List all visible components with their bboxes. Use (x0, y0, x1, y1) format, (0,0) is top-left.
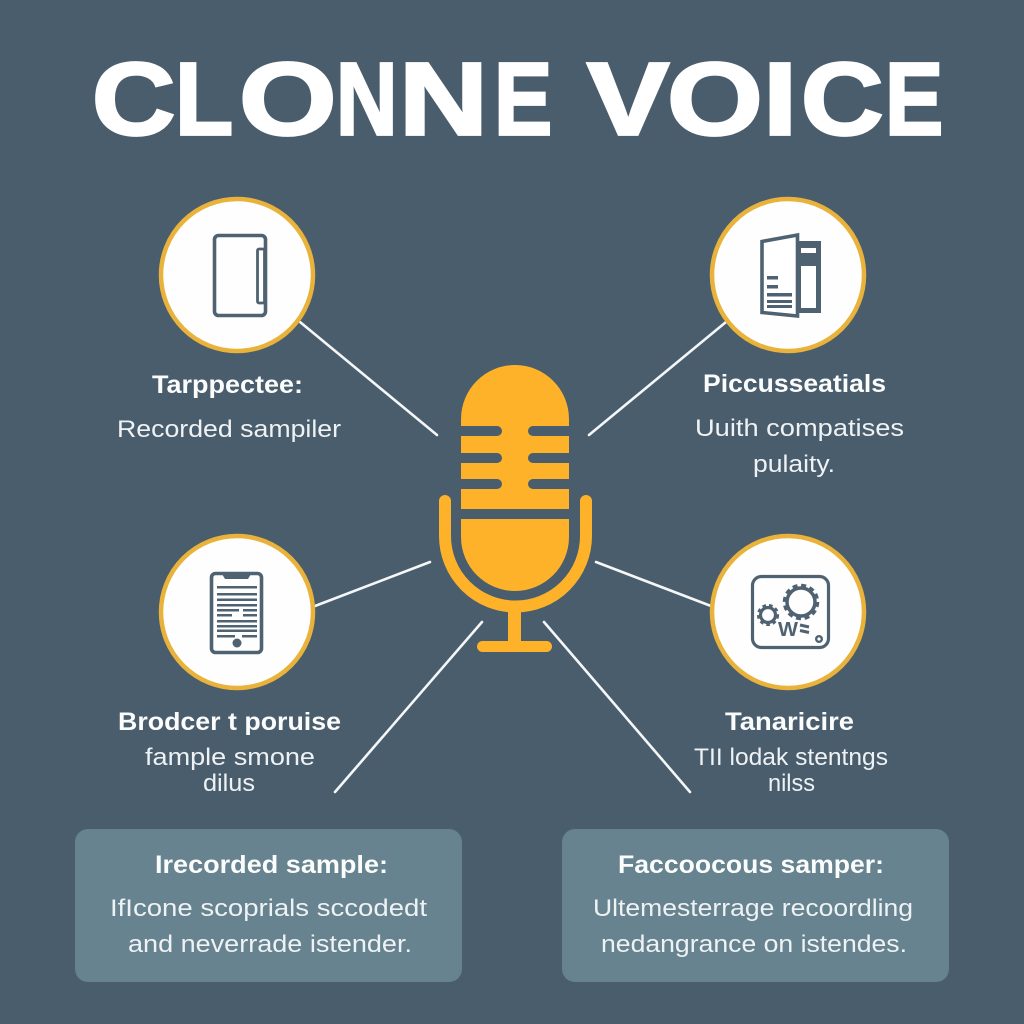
panel: recorded sample: IfIcone scoprials sccodedt (110, 895, 427, 922)
title: E (885, 41, 943, 156)
panel: recorded sample: Irecorded sample: (155, 851, 388, 879)
title: O (667, 41, 762, 156)
title: I (763, 41, 797, 156)
title: O (238, 41, 336, 156)
panel: recorded sample: and neverrade istender. (128, 931, 412, 958)
topic label: bottom right: Tanaricire (725, 708, 854, 736)
panel: faccoocous samper: Ultemesterrage recoordling (593, 895, 913, 922)
topic label: top right: Piccusseatials (703, 370, 886, 398)
topic label: top right (695, 370, 904, 478)
icon circle: top left, folder (161, 199, 313, 351)
topic label: bottom right: nilss (768, 770, 815, 797)
panel: faccoocous samper: nedangrance on istendes. (601, 931, 907, 958)
panel: faccoocous samper (562, 829, 949, 982)
title: E (494, 41, 552, 156)
title: N (399, 41, 488, 156)
topic label: bottom left (118, 708, 341, 797)
topic label: top left: Tarppectee: (152, 371, 303, 399)
central microphone icon (445, 365, 586, 652)
icon circle: bottom left, tablet document (161, 536, 313, 688)
topic label: top left: Recorded sampiler (117, 416, 341, 443)
panel: faccoocous samper: Faccoocous samper: (618, 851, 884, 879)
title: C (92, 41, 175, 156)
title: V (587, 41, 669, 156)
icon circle: top right, open document (712, 199, 864, 351)
topic label: bottom left: dilus (203, 770, 255, 797)
topic label: top left (117, 371, 341, 443)
topic label: bottom left: Brodcer t poruise (118, 708, 341, 736)
title: L (175, 41, 233, 156)
title: C (801, 41, 884, 156)
connector lines from microphone to topics (300, 322, 726, 792)
panel: recorded sample (75, 829, 462, 982)
topic label: bottom right (694, 708, 888, 797)
topic label: top right: pulaity. (753, 451, 835, 478)
title (92, 41, 943, 156)
icon circle: bottom right, gears panel (712, 536, 864, 688)
icon circle: bottom right, gears panel: W (778, 619, 798, 641)
topic label: top right: Uuith compatises (695, 415, 904, 442)
topic label: bottom right: TII lodak stentngs (694, 744, 888, 771)
title: N (336, 41, 397, 156)
topic label: bottom left: fample smone (145, 744, 315, 771)
